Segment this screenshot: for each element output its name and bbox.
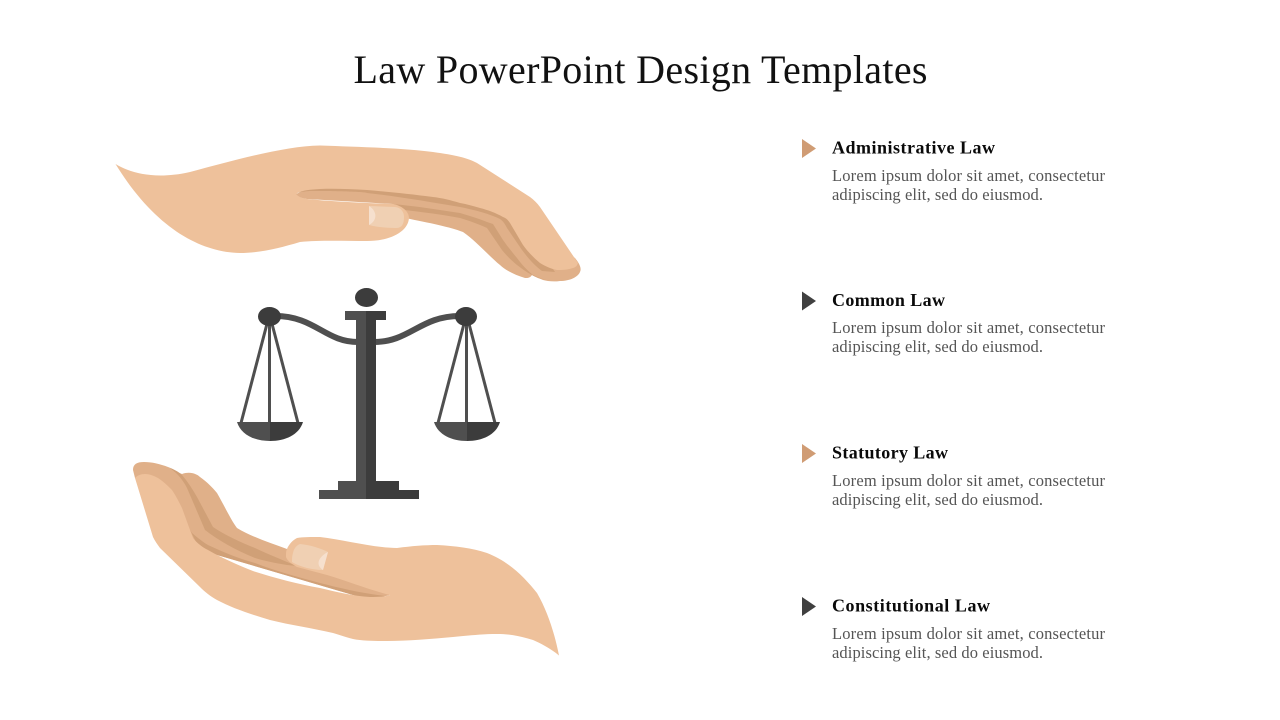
right pan	[434, 422, 467, 441]
heading: Statutory Law	[832, 442, 948, 462]
heading: Constitutional Law	[832, 596, 990, 616]
title: Law PowerPoint Design Templates	[354, 47, 928, 92]
item: Statutory Law	[802, 442, 1106, 509]
left pan	[237, 422, 270, 441]
icon: upper hand	[116, 146, 581, 281]
palm and thumb	[135, 474, 559, 656]
description: adipiscing elit, sed do eiusmod.	[832, 337, 1043, 356]
back of hand and thumb	[116, 146, 578, 270]
heading: Administrative Law	[832, 138, 995, 158]
finger crease inner	[168, 467, 297, 566]
description: Lorem ipsum dolor sit amet, consectetur	[832, 624, 1106, 643]
icon: lower hand	[133, 462, 559, 656]
arrow marker	[802, 292, 816, 310]
finger crease outer	[190, 530, 385, 600]
description: adipiscing elit, sed do eiusmod.	[832, 185, 1043, 204]
item: Constitutional Law	[802, 596, 1106, 662]
description: adipiscing elit, sed do eiusmod.	[832, 643, 1043, 662]
description: Lorem ipsum dolor sit amet, consectetur	[832, 318, 1106, 337]
description: adipiscing elit, sed do eiusmod.	[832, 490, 1043, 509]
scale beam	[275, 316, 460, 342]
item: Common Law	[802, 290, 1106, 356]
arrow marker	[802, 597, 816, 616]
icon: scales of justice	[237, 288, 500, 499]
thumbnail crescent	[319, 552, 328, 570]
fingers underside	[296, 187, 581, 281]
scale strings	[241, 320, 495, 423]
heading: Common Law	[832, 290, 945, 310]
description: Lorem ipsum dolor sit amet, consectetur	[832, 471, 1106, 490]
arrow marker	[802, 444, 816, 463]
item: Administrative Law	[802, 138, 1106, 204]
thumbnail	[369, 206, 404, 228]
finger crease lower	[393, 204, 547, 280]
finger crease upper	[298, 180, 555, 272]
fingers underside	[133, 462, 390, 600]
thumbnail crescent	[369, 206, 375, 225]
scale knobs	[258, 288, 477, 326]
description: Lorem ipsum dolor sit amet, consectetur	[832, 166, 1106, 185]
thumbnail	[292, 544, 328, 570]
scale column	[319, 311, 366, 499]
arrow marker	[802, 139, 816, 158]
